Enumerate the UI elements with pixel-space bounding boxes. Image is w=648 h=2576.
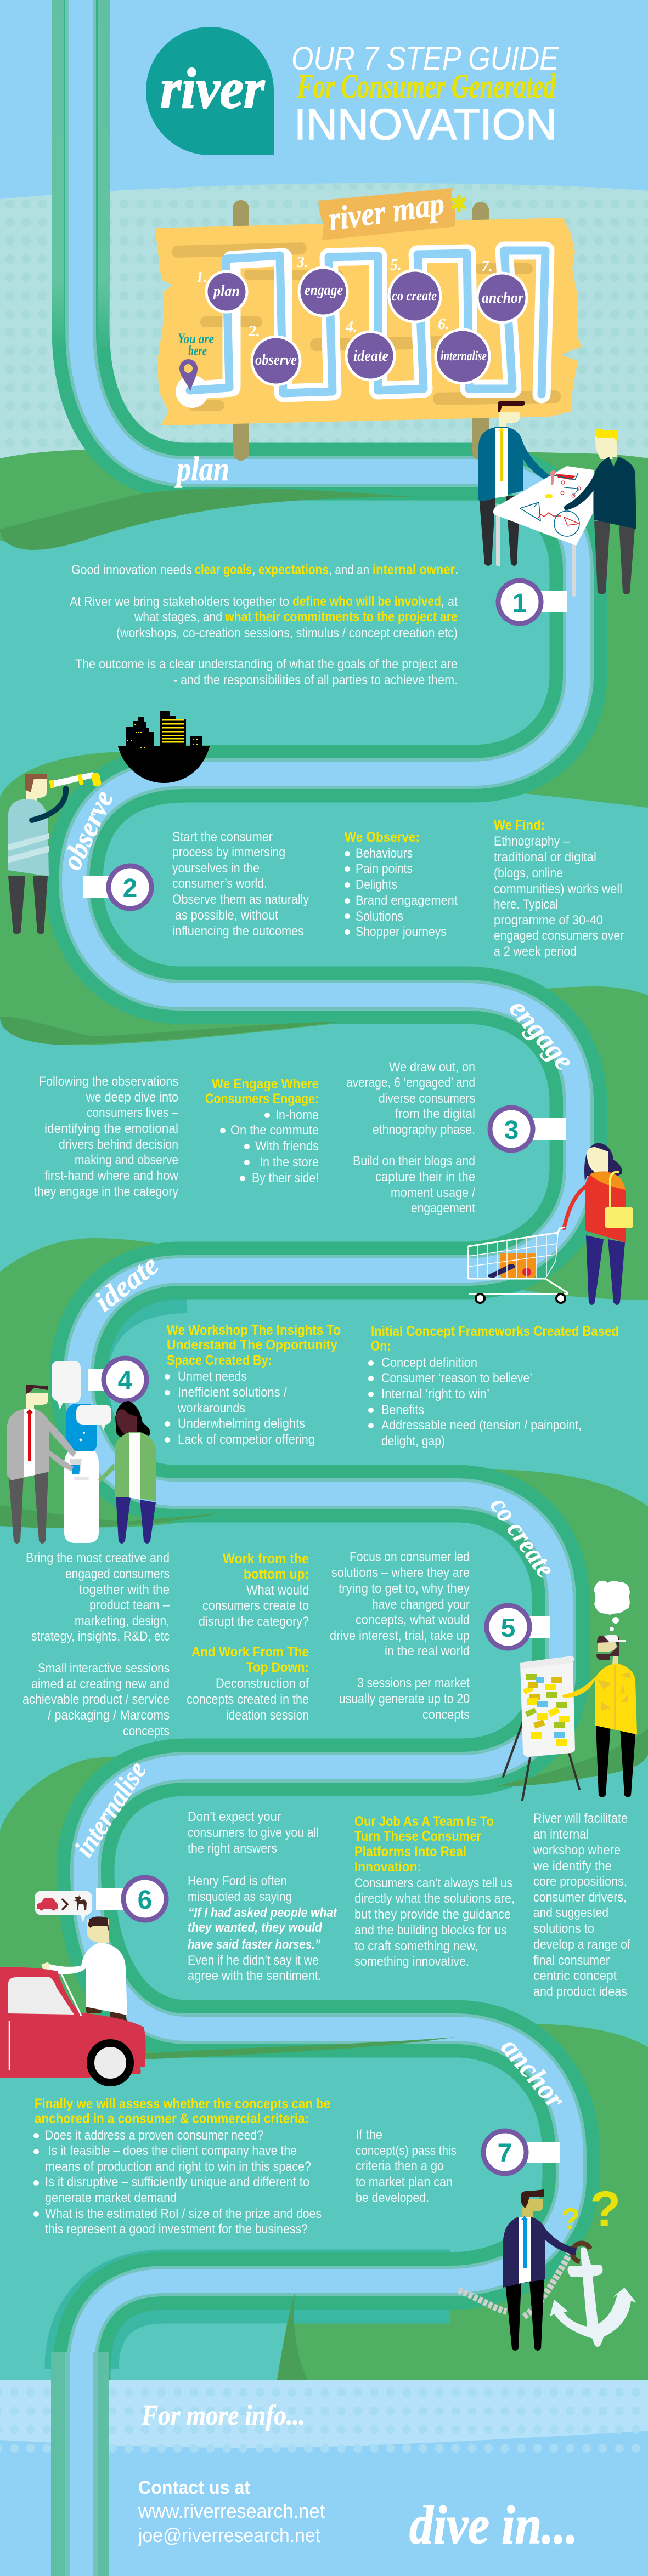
step 3 left text: first-hand where and how: [44, 1168, 179, 1183]
step 6 middle text: to craft something new,: [354, 1939, 478, 1954]
step 6 middle text: directly what the solutions are,: [354, 1891, 515, 1906]
step 5 left text: product team –: [89, 1598, 170, 1613]
badge 2: [83, 866, 151, 909]
step 4 left text: Unmet needs: [178, 1369, 247, 1384]
speech bubble car vs horse: [35, 1891, 92, 1922]
contact details: www.riverresearch.net: [138, 2500, 325, 2522]
we find text: a 2 week period: [494, 944, 577, 959]
step 4 left text: We Workshop The Insights To: [167, 1323, 341, 1338]
you are here: You are: [178, 331, 214, 347]
step 4 left text: Underwhelming delights: [178, 1416, 305, 1431]
step 7 side text: concept(s) pass this: [356, 2143, 457, 2158]
title: OUR 7 STEP GUIDE: [291, 40, 559, 77]
you are here: here: [188, 343, 207, 359]
step 3 right text: average, 6 ‘engaged’ and: [346, 1075, 475, 1090]
step 4 right text: On:: [371, 1338, 391, 1354]
step 3 right text: ethnography phase.: [373, 1122, 475, 1137]
step: internalise: internalise: [441, 349, 487, 364]
badge 7: [483, 2131, 560, 2174]
badge 4: 4: [118, 1366, 133, 1395]
step 5 middle text: What would: [246, 1583, 309, 1598]
we observe list: Brand engagement: [356, 893, 458, 908]
step 7 criteria text: What is the estimated RoI / size of the prize and does: [45, 2206, 322, 2221]
plan text: expectations: [258, 562, 329, 577]
step 3 left text: they engage in the category: [34, 1184, 178, 1199]
step 5 right text: usually generate up to 20: [339, 1692, 470, 1706]
step: co create: [389, 270, 441, 322]
step 5 middle text: bottom up:: [244, 1567, 309, 1582]
step 3 right text: moment usage /: [391, 1185, 475, 1200]
step 6 right text: we identify the: [533, 1859, 612, 1874]
river outlet: [51, 2352, 109, 2576]
you are here: [178, 331, 214, 359]
plan text: clear goals: [195, 562, 252, 577]
sea footer background: [0, 2380, 648, 2576]
step 4 right text: Internal ‘right to win’: [381, 1387, 489, 1402]
flipchart: [520, 1656, 575, 1757]
step: plan: [206, 271, 247, 312]
badge 7: 7: [498, 2139, 512, 2168]
step numbers: 2.: [248, 323, 260, 340]
shopping cart: [468, 1227, 568, 1303]
step 6 middle text: but they provide the guidance: [354, 1907, 511, 1922]
contact details: joe@riverresearch.net: [138, 2524, 320, 2546]
illustration: flipchart man: [503, 1581, 637, 1800]
question marks: ?: [590, 2181, 621, 2237]
step 7 criteria text: means of production and right to win in this space?: [45, 2159, 311, 2174]
title: [291, 40, 559, 149]
step 4 right text: [368, 1324, 619, 1449]
plan text: At River we bring stakeholders together to: [70, 594, 289, 609]
step 5 right text: 3 sessions per market: [357, 1676, 470, 1690]
step 7 criteria text: Is it feasible – does the client company have the: [48, 2143, 297, 2158]
for more info heading: For more info...: [141, 2400, 305, 2431]
step numbers: 7.: [481, 258, 493, 275]
step 6 right text: and suggested: [533, 1905, 608, 1920]
we find text: (blogs, online: [494, 866, 563, 881]
step 4 right text: Initial Concept Frameworks Created Based: [371, 1324, 619, 1339]
step 5 left text: marketing, design,: [75, 1614, 170, 1629]
river source bands: [52, 0, 110, 351]
route pin: [179, 359, 198, 391]
step 7 criteria text: Does it address a proven consumer need?: [45, 2128, 263, 2143]
step 6 right text: an internal: [533, 1827, 589, 1842]
we engage list: We Engage Where: [212, 1076, 319, 1092]
step 3 right text: engagement: [411, 1201, 475, 1216]
step 4 left text: workarounds: [177, 1401, 245, 1416]
sign board: [155, 218, 582, 425]
we engage list: Consumers Engage:: [205, 1091, 319, 1107]
step 5 middle text: ideation session: [226, 1708, 309, 1723]
plan text: , at: [441, 594, 458, 609]
step 5 middle text: disrupt the category?: [199, 1614, 309, 1629]
step 6 left text: agree with the sentiment.: [188, 1968, 322, 1983]
man two: [564, 429, 636, 594]
step 6 middle text: something innovative.: [354, 1954, 469, 1969]
step 6 right text: [533, 1811, 630, 1999]
step numbers: 5.: [390, 257, 402, 274]
we observe list: [345, 830, 458, 939]
man one: [478, 401, 550, 566]
river label: plan: plan: [174, 451, 229, 488]
map route: [176, 251, 545, 408]
step 6 middle text: and the building blocks for us: [354, 1923, 507, 1938]
badge 5: 5: [501, 1614, 515, 1643]
we engage list: By their side!: [252, 1171, 319, 1185]
contact details: Contact us at: [138, 2477, 250, 2498]
step: ideate: ideate: [353, 348, 388, 365]
man in white shirt: [41, 1916, 127, 2021]
step 5 left text: engaged consumers: [65, 1567, 170, 1581]
we engage list: In the store: [260, 1155, 319, 1170]
we engage list: On the commute: [230, 1123, 319, 1138]
step 5 left text: Small interactive sessions: [38, 1661, 170, 1676]
step 6 right text: workshop where: [533, 1843, 621, 1858]
plan text: (workshops, co-creation sessions, stimulus / concept creation etc): [116, 626, 458, 640]
step 5 middle text: And Work From The: [191, 1644, 309, 1660]
step 6 right text: consumer drivers,: [533, 1890, 627, 1905]
step 5 right text: concepts: [422, 1707, 470, 1722]
man in yellow coat: [562, 1635, 637, 1797]
river label: engage: engage: [503, 993, 580, 1076]
step 7 side text: criteria then a go: [356, 2159, 444, 2174]
river label: internalise: internalise: [68, 1756, 152, 1862]
step 6 right text: core propositions,: [533, 1874, 627, 1889]
plan text: what their commitments to the project are: [224, 609, 458, 625]
step 6 right text: develop a range of: [533, 1937, 630, 1952]
step 5 right text: have changed your: [372, 1597, 470, 1612]
step: co create: co create: [392, 288, 437, 304]
step numbers: 1.: [196, 269, 207, 286]
we observe list: Pain points: [356, 861, 413, 876]
step: ideate: [346, 332, 395, 380]
logo: [146, 27, 274, 155]
illustration: man with anchor: [459, 2181, 636, 2351]
step 3 right text: Build on their blogs and: [353, 1154, 475, 1168]
step 2 text: as possible, without: [175, 908, 278, 923]
step numbers: [196, 254, 493, 340]
we find text: communities) works well: [494, 882, 622, 897]
step 6 right text: final consumer: [533, 1953, 610, 1968]
badge 5: [487, 1605, 550, 1648]
sign smudges: [172, 242, 561, 411]
step 6 left text: misquoted as saying: [188, 1890, 292, 1904]
we find text: Ethnography –: [494, 834, 570, 849]
sky background: [0, 0, 648, 230]
step 6 left text: Don’t expect your: [188, 1809, 281, 1824]
speech bubble one: [52, 1361, 81, 1410]
plan text: [70, 562, 459, 688]
step 6 right text: solutions to: [533, 1921, 594, 1936]
we observe list: Behaviours: [356, 846, 413, 861]
step 5 right text: concepts, what would: [356, 1613, 470, 1627]
step: plan: plan: [212, 283, 240, 300]
plan text: ,: [252, 563, 256, 577]
step 6 middle text: Consumers can’t always tell us: [354, 1876, 512, 1891]
badge 3: 3: [504, 1116, 519, 1145]
pale hill background with dots: [0, 183, 648, 493]
step 2 text: Observe them as naturally: [172, 892, 309, 907]
chain: [459, 2253, 570, 2317]
step 4 right text: delight, gap): [381, 1434, 445, 1449]
flipchart legs: [503, 1722, 579, 1800]
teal background: [0, 483, 648, 2385]
we observe list: Solutions: [356, 909, 403, 924]
woman in green: [98, 1401, 156, 1544]
step 5 left text: achievable product / service: [22, 1692, 170, 1707]
step 5 left text: together with the: [79, 1582, 170, 1597]
anchor: [550, 2243, 636, 2347]
river map sign: [155, 185, 582, 461]
red car: [0, 1967, 146, 2083]
illustration: shopper with cart: [468, 1143, 633, 1305]
step 6 left text: [188, 1809, 337, 1983]
hills: [0, 449, 648, 2380]
step 3 left text: making and observe: [75, 1153, 178, 1167]
we observe list: Shopper journeys: [356, 924, 447, 939]
we find text: here. Typical: [494, 897, 558, 912]
river label: ideate: ideate: [89, 1250, 165, 1318]
step 4 left text: [165, 1323, 341, 1447]
table top: [493, 466, 594, 546]
step 5 left text: aimed at creating new and: [31, 1677, 170, 1692]
step 3 left text: consumers lives –: [87, 1105, 179, 1120]
step 6 left text: Even if he didn’t say it we: [188, 1953, 319, 1968]
we find text: programme of 30-40: [494, 913, 603, 928]
step 3 right text: capture their in the: [375, 1170, 475, 1184]
contact details: [138, 2477, 325, 2546]
speech bubble two: [76, 1405, 111, 1431]
step 6 middle text: Platforms Into Real: [354, 1844, 466, 1859]
map banner: river map: [326, 185, 447, 237]
river label: observe: observe: [56, 786, 120, 875]
step 6 middle text: [354, 1814, 515, 1969]
badge 6: 6: [138, 1886, 152, 1915]
we find text: engaged consumers over: [494, 928, 624, 943]
plan text: .: [455, 563, 459, 577]
we engage list: With friends: [255, 1139, 319, 1154]
illustration: person with telescope: [8, 772, 102, 934]
dive in: dive in...: [409, 2494, 578, 2555]
step 2 text: consumer’s world.: [172, 876, 267, 891]
step 5 middle text: consumers create to: [202, 1598, 309, 1613]
step 4 right text: Addressable need (tension / painpoint,: [381, 1418, 582, 1433]
step 6 right text: River will facilitate: [533, 1811, 628, 1826]
step 6 left text: consumers to give you all: [188, 1825, 319, 1840]
we observe list: We Observe:: [345, 830, 420, 845]
step 3 right text: diverse consumers: [379, 1091, 475, 1106]
step 5 right text: [330, 1550, 470, 1722]
step numbers: 4.: [345, 319, 357, 336]
step 6 right text: and product ideas: [533, 1984, 627, 1999]
step: observe: [252, 337, 300, 385]
badge 6: [96, 1877, 166, 1920]
step: anchor: [477, 273, 527, 322]
step 5 right text: trying to get to, why they: [339, 1581, 470, 1596]
step 3 left text: [34, 1074, 179, 1199]
step 5 left text: concepts: [123, 1724, 170, 1739]
step 6 left text: “If I had asked people what: [188, 1905, 337, 1920]
thought bubble: [594, 1581, 630, 1631]
step 6 middle text: Turn These Consumer: [354, 1829, 481, 1844]
river: [74, 0, 578, 2576]
step 4 left text: Understand The Opportunity: [167, 1337, 337, 1353]
step 2 text: [172, 830, 309, 939]
illustration: city: [118, 711, 210, 783]
step 5 middle text: Work from the: [223, 1551, 309, 1567]
we engage list: [205, 1076, 319, 1185]
question marks: ?: [561, 2201, 580, 2236]
step 7 side text: to market plan can: [356, 2175, 453, 2189]
step 5 left text: [22, 1551, 170, 1739]
water cooler: [64, 1404, 99, 1543]
title: INNOVATION: [294, 100, 557, 149]
plan text: what stages, and: [134, 610, 222, 625]
step 7 criteria text: Is it disruptive – sufficiently unique and different to: [45, 2175, 309, 2189]
step 2 text: yourselves in the: [172, 861, 260, 876]
step 7 criteria text: generate market demand: [45, 2191, 177, 2205]
plan text: define who will be involved: [292, 594, 441, 609]
step 2 text: process by immersing: [172, 845, 285, 860]
we find text: [494, 818, 624, 959]
step 7 criteria text: [33, 2096, 330, 2237]
step numbers: 6.: [438, 316, 449, 333]
step 5 left text: Bring the most creative and: [26, 1551, 170, 1565]
step 3 right text: [346, 1060, 475, 1216]
illustration: man with car: [0, 1891, 146, 2083]
step numbers: 3.: [296, 254, 308, 271]
plan text: - and the responsibilities of all parties to achieve them.: [173, 673, 458, 688]
hill shadows: [0, 488, 648, 2380]
badge 4: [88, 1358, 146, 1401]
step 3 right text: We draw out, on: [389, 1060, 475, 1075]
step 3 left text: drivers behind decision: [59, 1137, 178, 1152]
step 4 right text: Benefits: [381, 1403, 424, 1417]
badge 1: 1: [512, 589, 527, 618]
plan text: Good innovation needs: [71, 563, 192, 577]
we engage list: In-home: [275, 1108, 319, 1122]
step 3 left text: we deep dive into: [86, 1090, 178, 1105]
step: engage: [299, 268, 347, 316]
we observe list: Delights: [356, 877, 397, 892]
man with tie: [7, 1385, 76, 1544]
badge 2: 2: [123, 874, 137, 903]
step 7 side text: [356, 2127, 457, 2205]
step 3 left text: Following the observations: [39, 1074, 178, 1089]
step 5 right text: Focus on consumer led: [350, 1550, 470, 1564]
step 4 left text: Inefficient solutions /: [178, 1385, 287, 1400]
step 2 text: influencing the outcomes: [172, 924, 304, 939]
step 6 right text: centric concept: [533, 1968, 617, 1983]
step 5 left text: / packaging / Marcoms: [48, 1708, 170, 1723]
step 7 criteria text: anchored in a consumer & commercial criteria:: [35, 2111, 309, 2126]
step 3 left text: identifying the emotional: [44, 1121, 178, 1136]
step: anchor: anchor: [482, 290, 524, 307]
man in navy suit: [503, 2189, 577, 2351]
step 6 left text: Henry Ford is often: [188, 1874, 287, 1888]
step 4 right text: Consumer ‘reason to believe’: [381, 1371, 532, 1386]
step 6 left text: the right answers: [188, 1841, 277, 1856]
step 7 criteria text: this represent a good investment for the business?: [45, 2222, 308, 2237]
illustration: planning men and table: [478, 401, 636, 597]
step 6 middle text: Our Job As A Team Is To: [354, 1814, 494, 1829]
step 5 right text: in the real world: [385, 1644, 470, 1659]
question marks: [561, 2181, 621, 2237]
step 5 middle text: concepts created in the: [187, 1692, 309, 1707]
step 5 middle text: [187, 1551, 309, 1723]
plan text: internal owner: [373, 562, 455, 577]
step 5 right text: drive interest, trial, take up: [330, 1629, 470, 1643]
river label: anchor: anchor: [495, 2032, 571, 2115]
step 7 side text: be developed.: [356, 2191, 429, 2205]
step 6 middle text: Innovation:: [354, 1859, 421, 1875]
logo: river: [160, 57, 265, 120]
badge 1: [498, 581, 567, 623]
step 4 right text: Concept definition: [381, 1355, 477, 1370]
step 5 middle text: Top Down:: [246, 1660, 309, 1675]
step 6 left text: they wanted, they would: [188, 1920, 323, 1935]
teal inner river bands: [82, 1302, 544, 2369]
step 3 right text: from the digital: [395, 1107, 475, 1121]
plan text: , and an: [329, 563, 369, 577]
step 7 side text: If the: [356, 2127, 382, 2142]
river label: co create: co create: [484, 1491, 562, 1582]
sign posts: [233, 200, 489, 461]
step: internalise: [436, 330, 489, 383]
badge 3: [490, 1108, 566, 1150]
we find text: We Find:: [494, 818, 545, 833]
we find text: traditional or digital: [494, 850, 596, 865]
step: engage: engage: [305, 282, 343, 299]
step 4 left text: Space Created By:: [167, 1353, 272, 1368]
illustration: water cooler chat: [7, 1361, 156, 1544]
step 4 left text: Lack of competior offering: [178, 1432, 315, 1447]
step 2 text: Start the consumer: [172, 830, 273, 844]
step 5 right text: solutions – where they are: [331, 1565, 470, 1580]
step 5 middle text: Deconstruction of: [216, 1676, 309, 1691]
plan text: The outcome is a clear understanding of what the goals of the project are: [75, 657, 458, 672]
title: For Consumer Generated: [296, 68, 556, 105]
step 5 left text: strategy, insights, R&D, etc: [31, 1629, 170, 1644]
step 7 criteria text: Finally we will assess whether the concepts can be: [35, 2096, 330, 2112]
step 6 left text: have said faster horses.”: [188, 1937, 320, 1952]
table legs: [496, 504, 576, 597]
step: observe: observe: [255, 351, 297, 368]
